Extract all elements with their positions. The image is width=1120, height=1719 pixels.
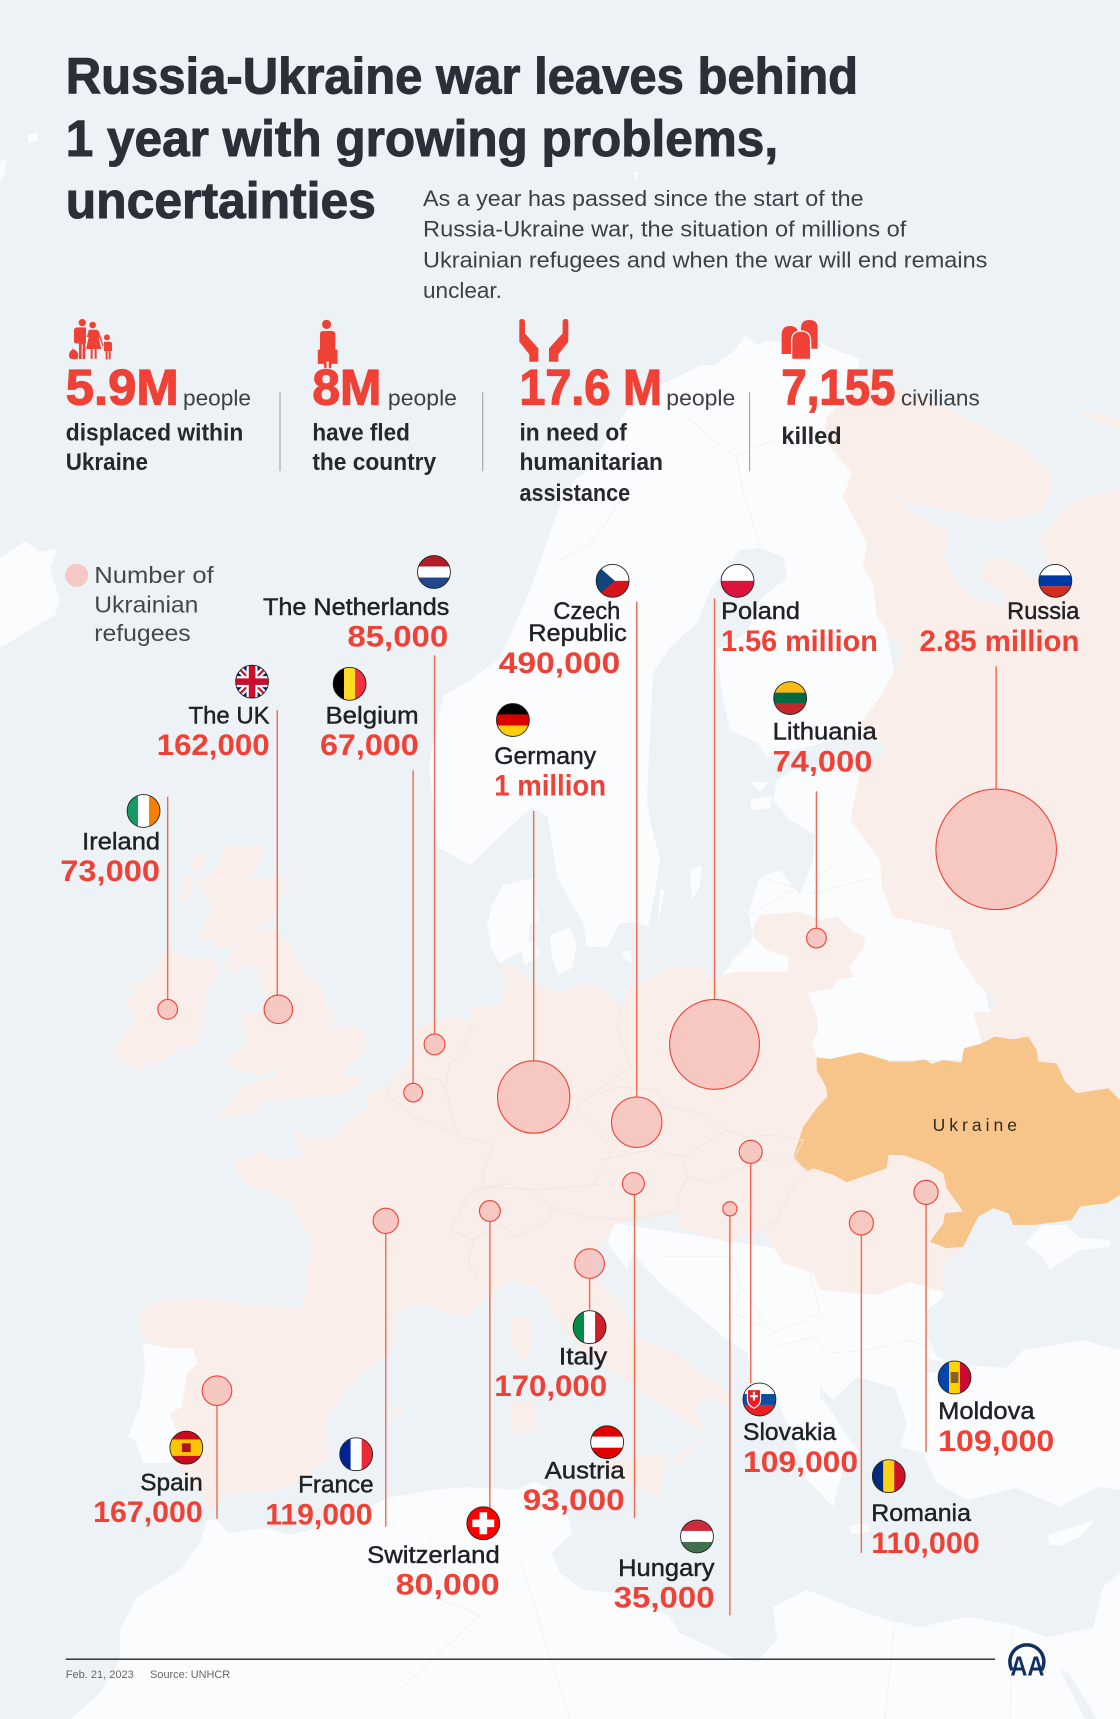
stat: have fled the country: the country xyxy=(312,449,437,476)
stat: in need of humanitarian assistance xyxy=(519,319,735,507)
country: Spain: Spain xyxy=(140,1469,203,1496)
flag: Russia xyxy=(1039,564,1072,597)
flag: Hungary xyxy=(681,1520,713,1553)
map: Sea of Marmara and Gulf of Suez xyxy=(925,1358,1097,1719)
country: Russia: 2.85 million xyxy=(919,625,1079,658)
title: 1 year with growing problems, xyxy=(66,110,778,167)
intro text: unclear. xyxy=(423,278,502,303)
country: Poland xyxy=(670,564,878,1089)
title: Russia-Ukraine war leaves behind xyxy=(66,48,858,105)
stat: in need of humanitarian assistance: people xyxy=(666,385,735,410)
country: Moldova: Moldova xyxy=(938,1398,1035,1425)
stat: civilians killed: killed xyxy=(781,423,842,450)
country: Italy xyxy=(494,1249,607,1403)
country: Ireland xyxy=(60,795,178,1019)
map label: Ukraine: Ukraine xyxy=(933,1115,1017,1135)
icon: gravestones xyxy=(782,320,818,359)
stat: in need of humanitarian assistance: assistance xyxy=(519,480,630,507)
country: Slovakia xyxy=(739,1140,858,1479)
country: Czech Republic xyxy=(499,564,662,1147)
flag: Belgium xyxy=(333,667,366,700)
stat: displaced within Ukraine: people xyxy=(183,385,251,410)
country: The Netherlands: The Netherlands xyxy=(263,594,449,621)
country: Russia: Russia xyxy=(1007,598,1080,625)
stat: civilians killed: civilians xyxy=(901,385,980,410)
intro text: As a year has passed since the start of the xyxy=(423,186,864,211)
stat dividers xyxy=(280,392,750,471)
country: Spain: 167,000 xyxy=(93,1496,203,1529)
stat: displaced within Ukraine xyxy=(66,319,251,476)
country: The Netherlands xyxy=(263,556,450,1055)
stat: have fled the country: people xyxy=(388,385,457,410)
country: Belgium xyxy=(320,667,422,1102)
country: Ireland: Ireland xyxy=(82,828,160,855)
country: Switzerland: Switzerland xyxy=(367,1542,500,1569)
flag: Spain xyxy=(170,1431,203,1464)
country: Lithuania: Lithuania xyxy=(773,719,877,746)
country: The UK: 162,000 xyxy=(157,729,270,762)
flag: Netherlands xyxy=(418,556,450,588)
map: Baltic Sea xyxy=(640,548,887,1000)
stat: in need of humanitarian assistance: humanitarian xyxy=(519,449,663,476)
flag: Ireland xyxy=(127,795,160,827)
country: Switzerland xyxy=(367,1201,500,1602)
country: Czech Republic: Republic xyxy=(528,620,627,647)
stat: have fled the country: 8M xyxy=(312,358,381,415)
country: The Netherlands: 85,000 xyxy=(347,621,448,654)
legend xyxy=(65,562,214,646)
flag: Moldova xyxy=(938,1361,971,1394)
map: country borders xyxy=(385,417,1013,1719)
country: Italy: Italy xyxy=(559,1343,607,1370)
country: Austria: 93,000 xyxy=(523,1484,625,1517)
flag: Czech Republic xyxy=(596,564,629,597)
stat: civilians killed: 7,155 xyxy=(781,358,895,415)
country: The UK: The UK xyxy=(188,702,270,729)
value 5.9M: 5.9M xyxy=(66,358,179,415)
country: Hungary xyxy=(614,1202,737,1615)
country: Poland: Poland xyxy=(721,598,800,625)
legend: refugees xyxy=(94,620,191,646)
country: Germany: 1 million xyxy=(494,770,606,803)
country: France: France xyxy=(298,1472,374,1499)
country: Hungary: Hungary xyxy=(618,1555,715,1582)
icon: person with suitcases xyxy=(318,320,338,368)
country: Russia xyxy=(919,564,1080,910)
country: Germany xyxy=(494,704,606,1133)
stat: displaced within Ukraine: Ukraine xyxy=(66,449,148,476)
stat: civilians killed xyxy=(781,320,980,450)
stat: have fled the country xyxy=(312,320,457,476)
title xyxy=(66,48,858,229)
intro text: Ukrainian refugees and when the war will end remains xyxy=(423,247,987,272)
title: uncertainties xyxy=(66,172,376,229)
footer: date and source: Source: UNHCR xyxy=(150,1669,230,1681)
country: The UK xyxy=(157,665,293,1024)
footer: date and source xyxy=(66,1669,230,1681)
flag: Slovakia xyxy=(743,1383,776,1416)
country: Romania: Romania xyxy=(871,1500,972,1527)
country: Switzerland: 80,000 xyxy=(396,1569,500,1602)
country: Belgium: Belgium xyxy=(325,702,419,729)
country: Belgium: 67,000 xyxy=(320,729,419,762)
map: host countries with refugees xyxy=(112,380,1120,1510)
country: Ireland: 73,000 xyxy=(60,855,160,888)
country: Slovakia: Slovakia xyxy=(743,1419,837,1446)
icon: open hands xyxy=(519,319,568,362)
icon: family xyxy=(69,319,112,359)
stat: in need of humanitarian assistance: in need of xyxy=(519,420,628,447)
intro text: Russia-Ukraine war, the situation of millions of xyxy=(423,217,907,242)
legend: Ukrainian xyxy=(94,592,198,618)
country: Hungary: 35,000 xyxy=(614,1582,715,1615)
flag: Austria xyxy=(591,1426,624,1459)
flag: Italy xyxy=(573,1311,606,1344)
flag: Switzerland xyxy=(467,1507,500,1540)
map: Denmark and Baltic islands xyxy=(487,782,772,975)
country: Czech Republic: 490,000 xyxy=(499,647,620,680)
flag: Lithuania xyxy=(774,682,807,715)
country: Spain xyxy=(93,1376,232,1529)
country: Italy: 170,000 xyxy=(494,1370,607,1403)
stat: displaced within Ukraine: displaced within xyxy=(66,420,243,447)
country: Lithuania xyxy=(773,682,877,948)
country: France xyxy=(265,1208,398,1531)
flag: Germany xyxy=(496,704,529,736)
country: Moldova xyxy=(914,1180,1054,1458)
flag: Poland xyxy=(721,564,754,597)
footer: date and source: Feb. 21, 2023 xyxy=(66,1669,134,1681)
flag: Romania xyxy=(872,1460,905,1493)
country: Romania xyxy=(849,1211,980,1560)
flag: UK xyxy=(236,665,268,698)
country: Germany: Germany xyxy=(494,743,596,770)
country: Slovakia: 109,000 xyxy=(743,1446,858,1479)
map: Ukraine xyxy=(793,1037,1120,1248)
country: Austria: Austria xyxy=(545,1457,625,1484)
intro text xyxy=(423,186,987,303)
country: Czech Republic: Czech xyxy=(553,598,620,625)
stat: have fled the country: have fled xyxy=(312,420,410,447)
legend: Number of xyxy=(94,562,214,588)
footer rule xyxy=(66,1658,995,1660)
country: France: 119,000 xyxy=(265,1498,373,1531)
logo: Anadolu Agency: AA xyxy=(1010,1651,1045,1682)
flag: France xyxy=(340,1438,373,1471)
stat: in need of humanitarian assistance: 17.6 M xyxy=(519,358,662,415)
country: Moldova: 109,000 xyxy=(938,1425,1054,1458)
country: Austria xyxy=(523,1173,644,1518)
country: Poland: 1.56 million xyxy=(721,625,878,658)
country: Romania: 110,000 xyxy=(871,1527,980,1560)
country: Lithuania: 74,000 xyxy=(773,746,872,779)
